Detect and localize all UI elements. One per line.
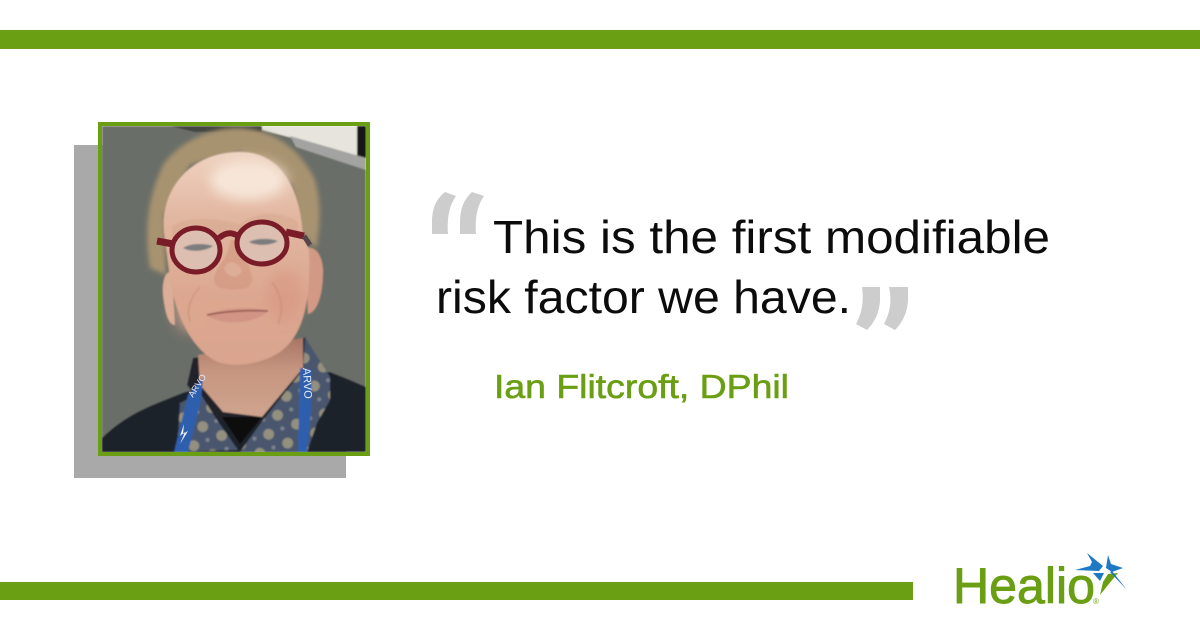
quote text: risk factor we have. [436,271,851,323]
scarf left [177,393,238,452]
lenses [174,230,218,270]
lanyard right [298,368,312,452]
green photo frame [100,124,368,454]
eyes [183,244,213,251]
black tee [222,417,262,444]
portrait photo of Ian Flitcroft [102,126,366,452]
smile lines [188,287,200,322]
closing quotation mark [856,287,908,330]
lanyard text: ARVO [186,372,208,399]
quote text: This is the first modifiable [493,211,1050,263]
logo star [1075,553,1127,595]
brow band [173,215,297,236]
scarf right [240,337,330,452]
opening quotation mark [432,192,484,234]
grey offset panel behind photo [74,145,346,478]
attribution name: Ian Flitcroft, DPhil [494,368,789,405]
forehead highlight [210,160,286,200]
mouth [207,308,268,322]
neck [198,338,303,417]
ears [305,247,323,314]
registered mark: ® [1093,597,1099,606]
glasses [157,222,310,272]
lanyard left [174,378,203,452]
top green bar [0,30,1200,49]
Healio logo [953,553,1127,614]
portrait photo of Ian Flitcroft: ARVO [300,368,314,400]
quote text [436,211,1050,323]
logo wordmark: Healio [953,558,1095,614]
face [164,152,309,365]
bottom green bar [0,582,913,600]
scarf collar shadow [187,337,312,420]
lanyard logo mark [180,424,188,444]
cheek shading [272,272,306,312]
hair [147,128,320,275]
nose [214,240,252,290]
sweater [102,372,366,452]
